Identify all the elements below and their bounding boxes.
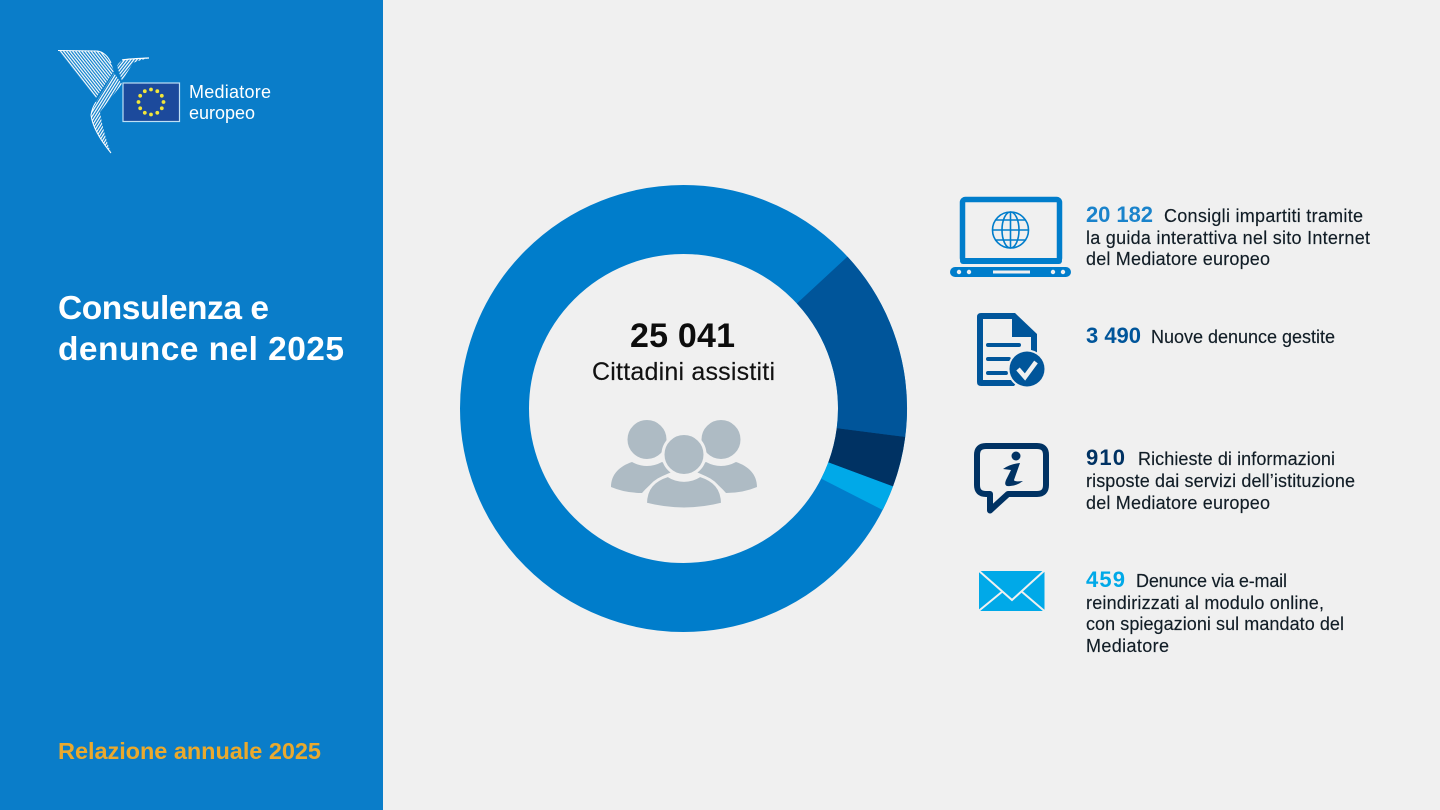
logo: EU flag bbox=[123, 83, 180, 122]
segment: information requests bbox=[861, 433, 871, 474]
text: e-mail complaints: Denunce via e-mail bbox=[1136, 571, 1287, 591]
text: new complaints: Nuove denunce gestite bbox=[1151, 327, 1335, 347]
title bbox=[58, 290, 344, 368]
donut centre total bbox=[592, 317, 775, 386]
row: information requests bbox=[977, 445, 1355, 513]
text: e-mail complaints: Mediatore bbox=[1086, 636, 1169, 656]
text: e-mail complaints bbox=[1086, 567, 1344, 656]
segment: interactive guide bbox=[494, 220, 872, 598]
text: information requests: Richieste di informazioni bbox=[1138, 449, 1335, 469]
row: interactive guide bbox=[950, 200, 1370, 277]
text: information requests: 910 bbox=[1086, 445, 1125, 470]
segment: new complaints bbox=[822, 280, 873, 433]
text: new complaints bbox=[1086, 323, 1335, 348]
row: new complaints bbox=[977, 313, 1335, 388]
title: Consulenza e bbox=[58, 290, 269, 327]
text: interactive guide: 20 182 bbox=[1086, 202, 1153, 227]
logo text: europeo bbox=[189, 103, 255, 123]
text: information requests: risposte dai servizi dell’istituzione bbox=[1086, 471, 1355, 491]
total label: Cittadini assistiti bbox=[592, 358, 775, 386]
logo wings bbox=[58, 50, 149, 153]
text: information requests: del Mediatore europeo bbox=[1086, 493, 1270, 513]
text: interactive guide: la guida interattiva nel sito Internet bbox=[1086, 228, 1370, 248]
text: e-mail complaints: 459 bbox=[1086, 567, 1125, 592]
logo text bbox=[189, 82, 271, 123]
segment: e-mail complaints bbox=[852, 474, 861, 494]
icon: group of citizens bbox=[611, 418, 757, 509]
icon: info speech bubble bbox=[977, 446, 1046, 510]
text: information requests bbox=[1086, 445, 1355, 513]
icon: laptop with globe bbox=[950, 200, 1071, 277]
text: interactive guide: Consigli impartiti tramite bbox=[1164, 206, 1363, 226]
panel: left blue sidebar bbox=[0, 0, 383, 810]
donut chart bbox=[494, 220, 873, 598]
text: interactive guide bbox=[1086, 202, 1370, 269]
text: interactive guide: del Mediatore europeo bbox=[1086, 249, 1270, 269]
icon: envelope bbox=[978, 570, 1045, 612]
title: denunce nel 2025 bbox=[58, 331, 344, 368]
row: e-mail complaints bbox=[978, 567, 1344, 656]
text: e-mail complaints: con spiegazioni sul mandato del bbox=[1086, 614, 1344, 634]
footer: annual report: Relazione annuale 2025 bbox=[58, 738, 321, 764]
logo: European Ombudsman bbox=[58, 50, 271, 153]
text: e-mail complaints: reindirizzati al modulo online, bbox=[1086, 593, 1324, 613]
logo text: Mediatore bbox=[189, 82, 271, 102]
icon: document with check bbox=[977, 313, 1046, 388]
total number: 25 041 bbox=[630, 317, 735, 355]
text: new complaints: 3 490 bbox=[1086, 323, 1141, 348]
